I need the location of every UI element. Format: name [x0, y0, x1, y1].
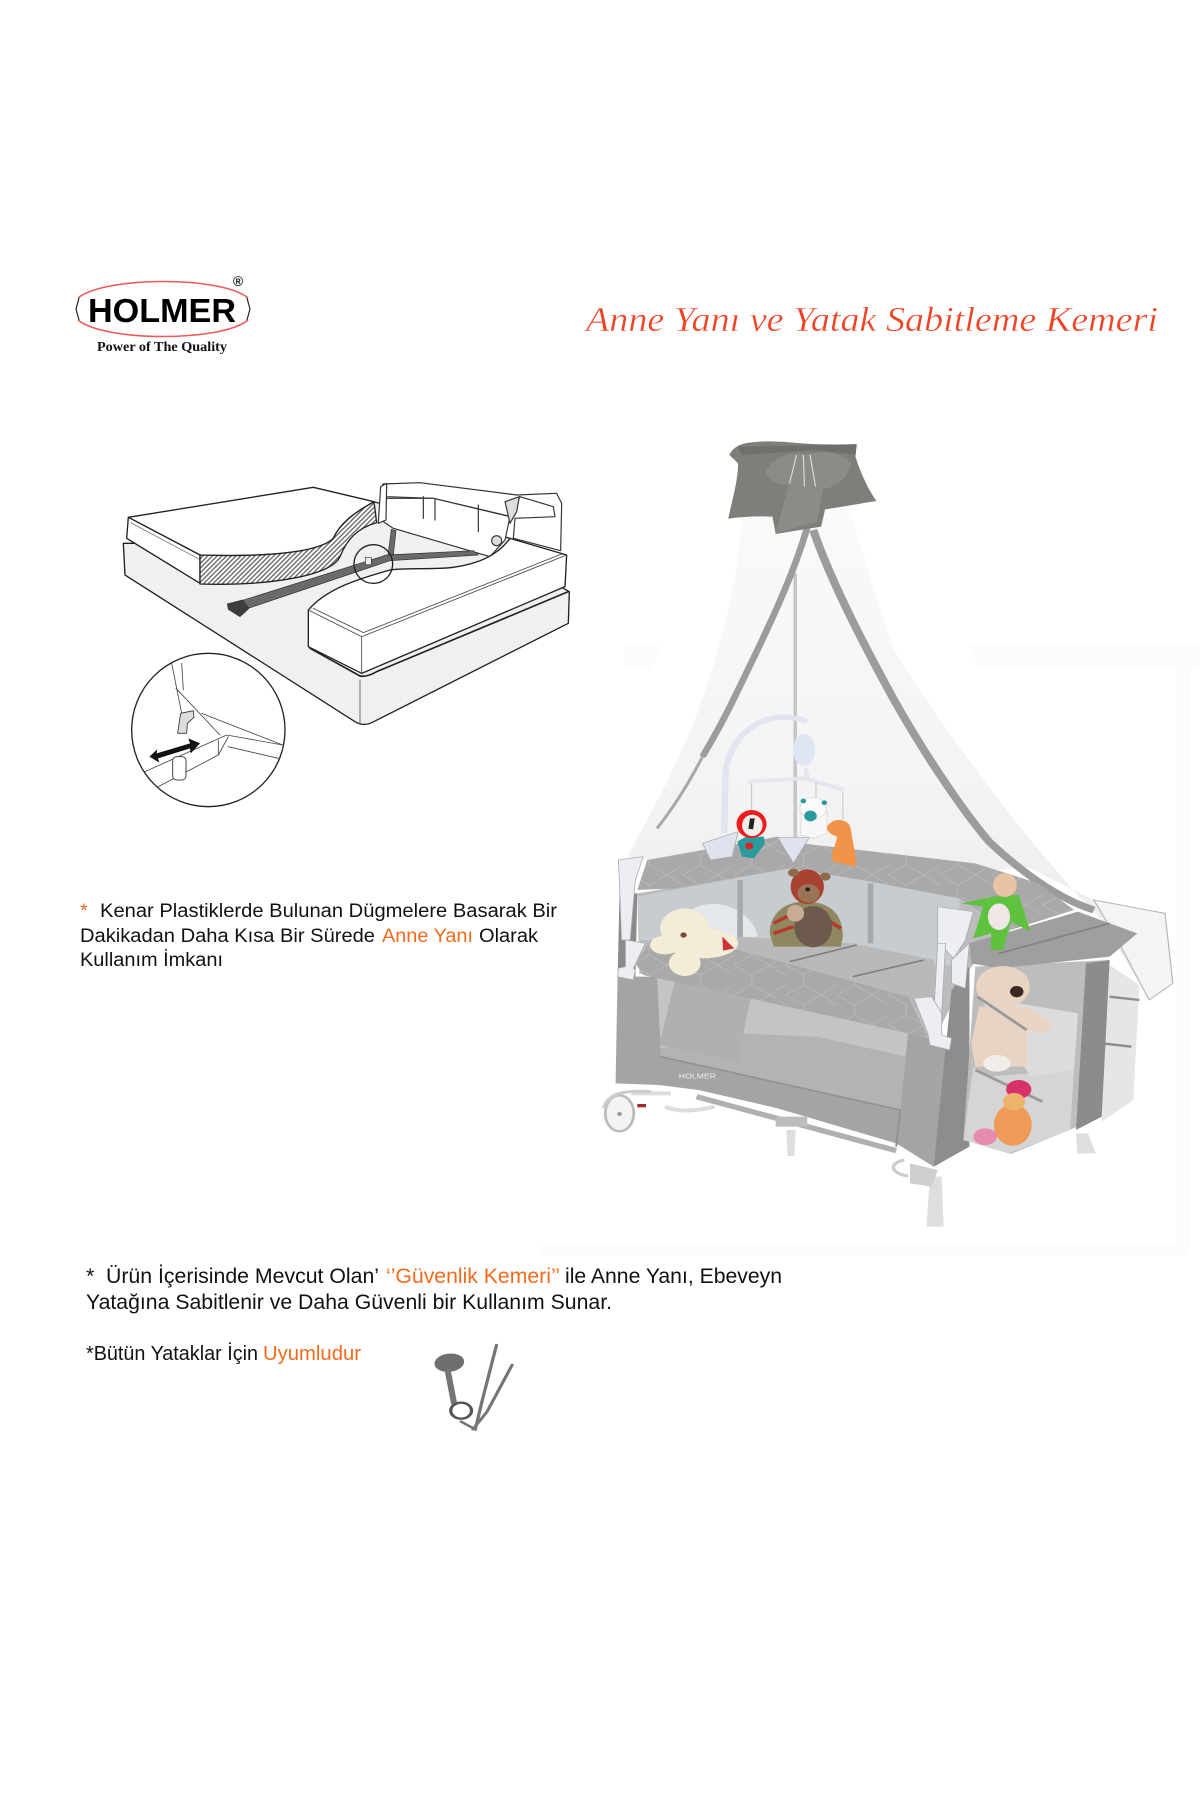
hanging toy: red lion: [737, 810, 767, 858]
toy: beige teddy: [971, 966, 1052, 1072]
front rail: [635, 940, 928, 1037]
brand mark: HOLMER: [679, 1072, 716, 1080]
paragraph: side sleeping use: *: [80, 900, 88, 922]
interior backing: [637, 868, 1011, 1040]
organiser mesh back: [1102, 965, 1139, 1122]
rear mesh: [637, 868, 959, 967]
paragraph: safety belt: Yatağına Sabitlenir ve Daha Güvenli bir Kullanım Sunar.: [86, 1290, 612, 1314]
paragraph: safety belt: [86, 1264, 782, 1314]
ribbon left, lower fade: [657, 757, 703, 828]
hanging toy: polar bear: [800, 798, 827, 838]
paragraph: side sleeping use: Kenar Plastiklerde Bulunan Dügmelere Basarak Bir: [100, 900, 557, 922]
paragraph: side sleeping use: Anne Yanı: [382, 925, 473, 947]
locator circle: [354, 545, 393, 583]
organiser pocket straps: [975, 997, 1042, 1102]
organiser: [963, 960, 1110, 1154]
paragraph: safety belt: Ürün İçerisinde Mevcut Olan’: [106, 1264, 379, 1288]
ribbon right: [813, 530, 1094, 910]
title: Anne Yanı ve Yatak Sabitleme Kemeri: [584, 300, 1158, 339]
net: [627, 508, 1173, 1000]
toy: striped bear: [770, 869, 843, 947]
paragraph: safety belt: ile Anne Yanı, Ebeveyn: [565, 1264, 782, 1288]
logo: HOLMER: ®: [233, 273, 244, 289]
paragraph: safety belt: ‘’Güvenlik Kemeri’’: [386, 1264, 560, 1288]
cot: [604, 798, 1139, 1227]
pole: [793, 573, 797, 840]
under frame: [697, 1097, 896, 1151]
icon: safety belt: [431, 1345, 512, 1429]
paragraph: side sleeping use: Olarak: [479, 925, 538, 947]
exposed base surface: [267, 524, 485, 647]
side and end panel: [618, 893, 637, 980]
note: compatible with all beds: Uyumludur: [263, 1342, 361, 1365]
detail inset: [132, 653, 285, 807]
front lower fabric: [616, 967, 969, 1167]
logo: HOLMER: [76, 273, 250, 354]
toy: cream teddy: [650, 908, 738, 976]
mattress: [738, 937, 934, 1013]
paragraph: side sleeping use: [80, 900, 557, 971]
mattress section hatch: [200, 502, 377, 584]
paragraph: safety belt: *: [86, 1264, 95, 1288]
cot frame behind the bed: [378, 483, 562, 557]
logo: HOLMER: Power of The Quality: [97, 339, 227, 354]
straps: [227, 529, 478, 617]
illustration: cot strapped to a parent bed: [123, 483, 569, 807]
bow: [728, 441, 876, 534]
cut-away mattress, left: [128, 487, 374, 556]
changing top: [969, 912, 1137, 968]
logo: HOLMER: HOLMER: [88, 292, 236, 329]
paragraph: side sleeping use: Kullanım İmkanı: [80, 948, 223, 971]
white brackets: [618, 832, 973, 1050]
front mesh window: [657, 977, 908, 1110]
hanging toy: orange dinosaur: [827, 820, 856, 867]
legs: [786, 1130, 1096, 1227]
cut-away mattress, right: [308, 538, 567, 673]
paragraph: side sleeping use: Dakikadan Daha Kısa Bir Sürede: [80, 925, 375, 947]
wheel: [604, 1091, 651, 1131]
back rail: [637, 837, 1074, 930]
note: compatible with all beds: [86, 1342, 361, 1365]
mobile: [724, 717, 844, 833]
canopy net and ribbons: [627, 441, 1173, 1000]
box spring base: [123, 502, 569, 724]
toy: green doll: [961, 873, 1031, 950]
note: compatible with all beds: *Bütün Yataklar İçin: [86, 1342, 258, 1365]
storage pocket: [659, 982, 751, 1062]
toy: pink plush: [973, 1080, 1032, 1146]
ribbon left: [703, 523, 808, 757]
